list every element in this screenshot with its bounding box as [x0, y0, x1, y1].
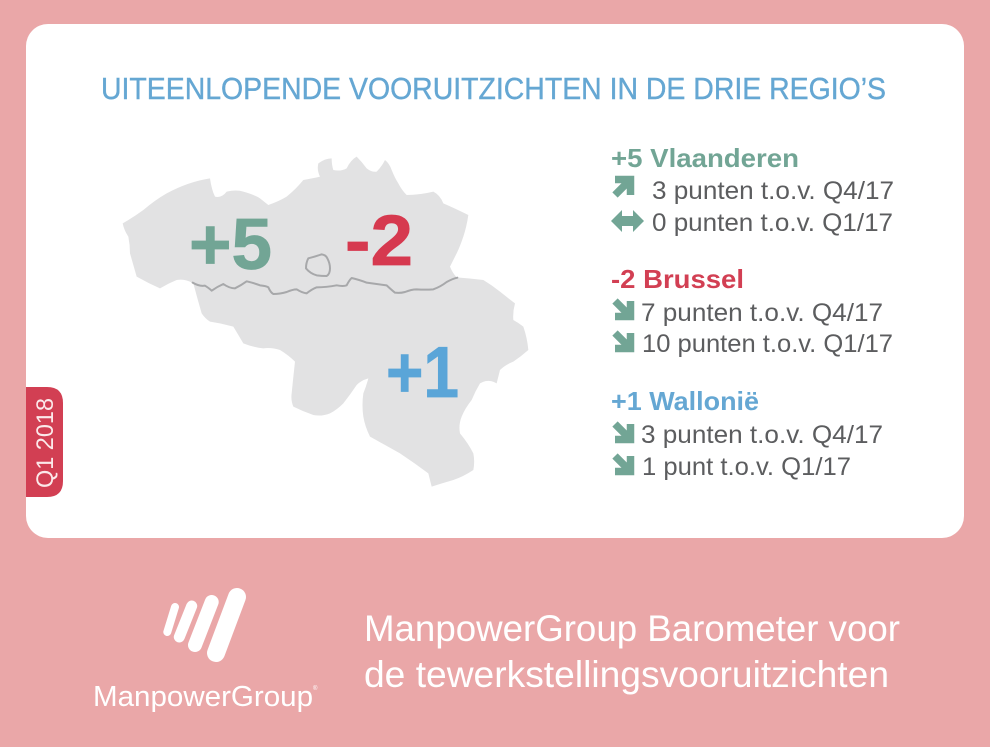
tagline: line 2: de tewerkstellingsvooruitzichten: [364, 654, 889, 695]
map of Belgium: [123, 157, 528, 487]
map: regional border: [193, 278, 457, 294]
line: Q4/17: 3 punten t.o.v. Q4/17: [652, 177, 894, 205]
tagline: [364, 608, 900, 695]
heading: Vlaanderen: +5 Vlaanderen: [611, 143, 799, 173]
icon: arrow left-right: [611, 210, 644, 232]
logo: wordmark: ManpowerGroup: [93, 681, 313, 713]
icon: arrow down-right: [615, 333, 630, 348]
icon: arrow down-right: [615, 424, 630, 440]
line: Q1/17: 1 punt t.o.v. Q1/17: [642, 453, 851, 481]
heading: Brussel: -2 Brussel: [611, 264, 744, 294]
tagline: line 1: ManpowerGroup Barometer voor: [364, 608, 900, 649]
map value: Brussel: -2: [345, 202, 413, 281]
title: UITEENLOPENDE VOORUITZICHTEN IN DE DRIE REGIO’S: [101, 71, 886, 106]
line: Q1/17: 10 punten t.o.v. Q1/17: [642, 330, 893, 358]
map: Brussels outline: [306, 254, 330, 276]
block: Vlaanderen: [611, 143, 894, 237]
panel: white card: [26, 24, 964, 538]
logo: ManpowerGroup: [93, 597, 318, 713]
line: Q4/17: 3 punten t.o.v. Q4/17: [641, 421, 883, 449]
line: Q4/17: 7 punten t.o.v. Q4/17: [641, 299, 883, 327]
icon: arrow down-right: [615, 301, 630, 316]
tab: quarter label: [26, 387, 63, 497]
logo: bars icon: [167, 597, 237, 653]
block: Wallonië: [611, 386, 883, 481]
logo: registered mark: ®: [313, 685, 318, 692]
map: country shape: [123, 157, 528, 487]
tab: quarter label: Q1 2018: [32, 398, 59, 488]
icon: arrow up-right: [615, 180, 630, 195]
map value: Vlaanderen: +5: [189, 205, 272, 285]
line: Q1/17: 0 punten t.o.v. Q1/17: [652, 209, 893, 237]
heading: Wallonië: +1 Wallonië: [611, 386, 759, 416]
map value: Wallonië: +1: [386, 333, 459, 413]
block: Brussel: [611, 264, 893, 358]
icon: arrow down-right: [615, 456, 630, 472]
